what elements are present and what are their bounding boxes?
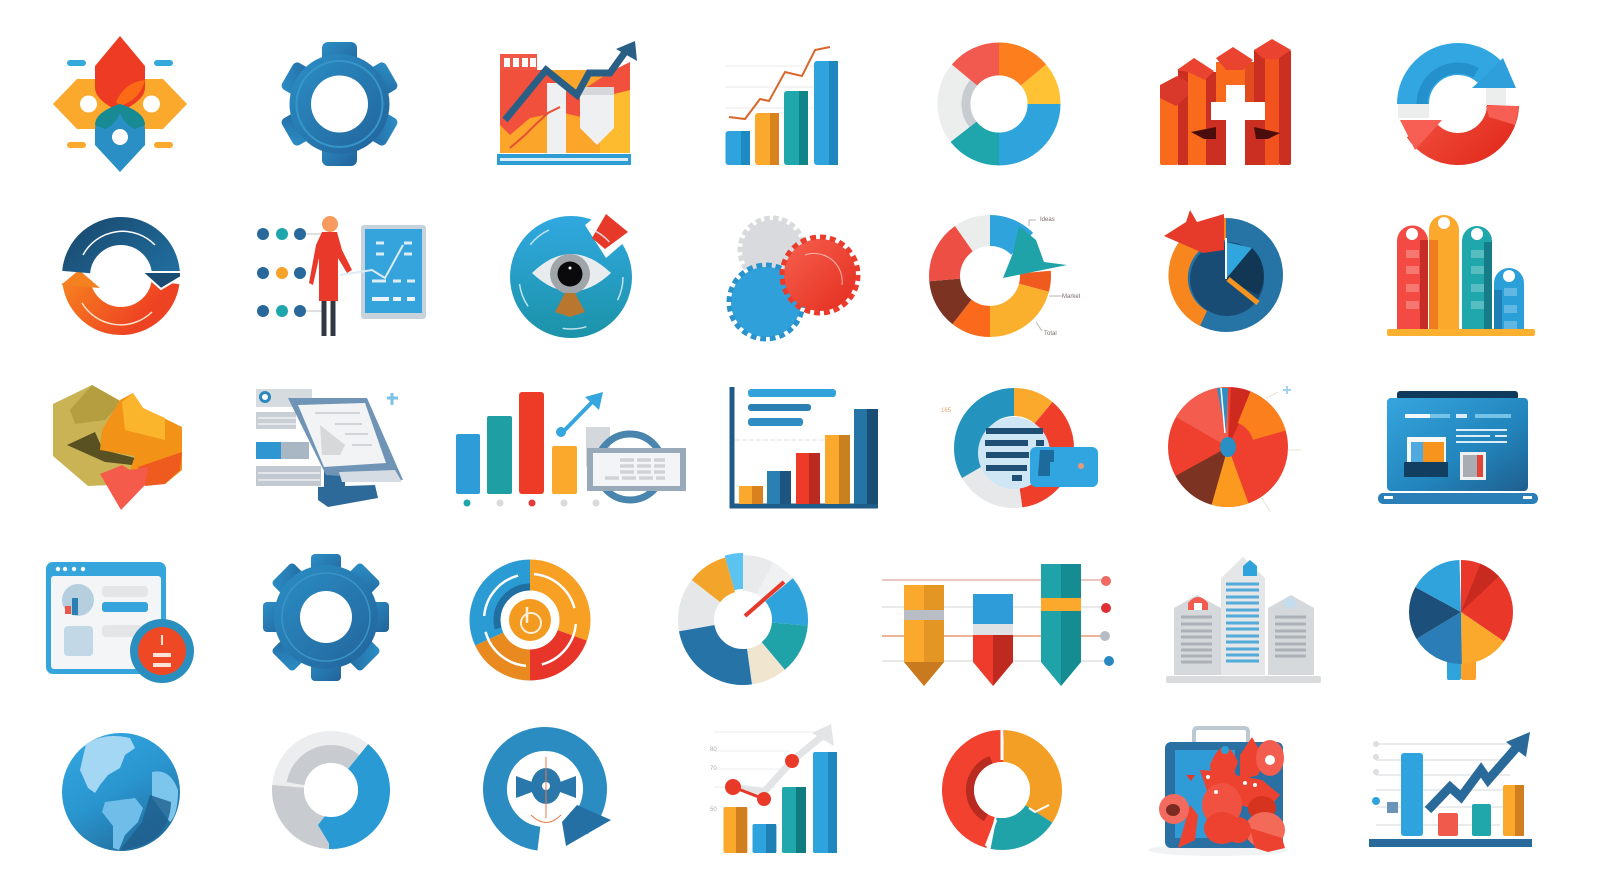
icon: concentric orange blue donut [480, 570, 580, 670]
icon: blue red refresh cycle [1398, 57, 1518, 151]
icon: low poly heart shape [53, 385, 182, 510]
icon: eye in blue circle [510, 208, 636, 338]
icon: segmented donut [954, 59, 1044, 149]
icon: donut with teal arrow: Ideas [1040, 217, 1055, 223]
icon: case with red blobs [1148, 728, 1288, 856]
icon: bars with red dots and arrow: 80 [710, 747, 717, 753]
icon: gray blue ring arrows [270, 729, 392, 851]
icon: bar chart with arrow and screen [456, 392, 686, 506]
icon: area chart with arrow [497, 41, 637, 165]
icon: red pie chart [1168, 386, 1301, 512]
icon: bars with line [725, 47, 838, 165]
icon: ring arrow with target [489, 733, 611, 846]
icon: fragmented radial chart [694, 571, 792, 669]
icon: pie tree [1435, 586, 1487, 680]
icon: browser window with badge [46, 562, 194, 683]
icon: office buildings [1166, 557, 1321, 683]
icon: presenter with tablet [257, 216, 426, 336]
icon: thermometer bars [1387, 215, 1535, 336]
icon: clock with red flag [1164, 210, 1283, 332]
icon: flower hexagon [53, 36, 187, 172]
icon: globe [62, 733, 180, 851]
icon: three gears [729, 218, 858, 339]
icon: red orange teal donut [941, 729, 1063, 851]
icon: laptop with dashboard [1378, 391, 1538, 504]
icon: chart with list bars [732, 387, 878, 506]
icon: donut with list and card: 165 [941, 408, 952, 414]
icon: donut with teal arrow: Market [1062, 294, 1081, 300]
icon: trend chart with arrow [1369, 732, 1532, 847]
icon: bars with red dots and arrow [710, 724, 837, 853]
icon: bars with red dots and arrow: 70 [710, 766, 717, 772]
icon: donut with teal arrow [944, 217, 1081, 337]
icon: blue orange cycle arrows [61, 225, 181, 327]
icon: pencil bars chart [882, 564, 1114, 686]
icon: eight tooth gear [263, 554, 389, 681]
icon: factory bars with cross [1160, 39, 1291, 165]
icon: bars with red dots and arrow: 50 [710, 807, 717, 813]
icon: donut with teal arrow: Total [1044, 331, 1057, 337]
icon: documents and monitor [256, 389, 403, 507]
icon: donut with list and card [941, 402, 1098, 494]
icon: gear [280, 42, 399, 166]
